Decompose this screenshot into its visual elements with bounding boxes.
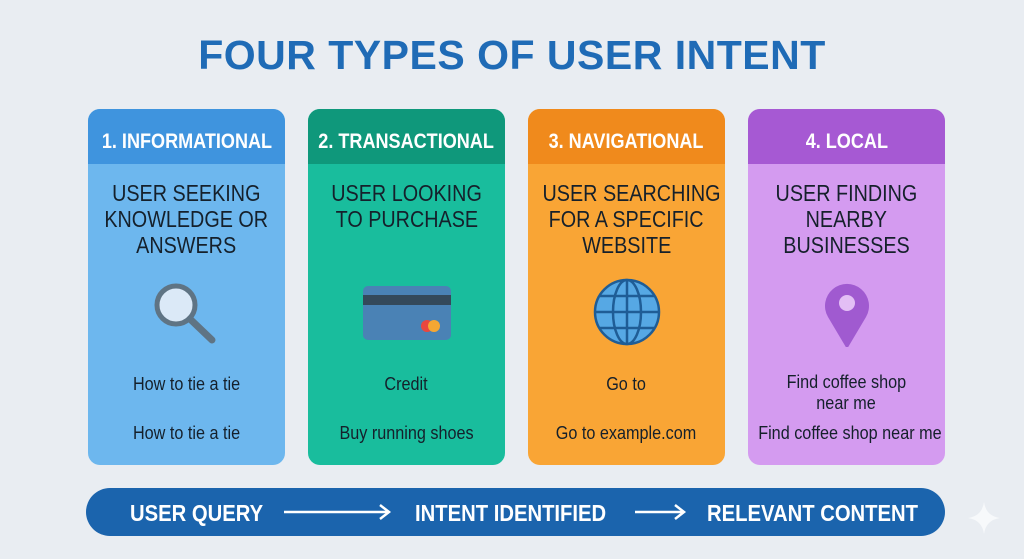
panel: transactional xyxy=(308,109,505,465)
example: transactional 1: Credit xyxy=(385,374,428,394)
step: relevant content: RELEVANT CONTENT xyxy=(707,500,918,526)
arrow 2 xyxy=(635,504,686,520)
header: informational xyxy=(88,109,285,164)
icon: location pin xyxy=(825,284,869,347)
description: navigational xyxy=(542,180,721,258)
panel: local xyxy=(748,109,945,465)
example: informational 2: How to tie a tie xyxy=(133,423,240,443)
description: local xyxy=(776,180,917,258)
header: local xyxy=(748,109,945,164)
step: intent identified: INTENT IDENTIFIED xyxy=(415,500,606,526)
arrow 1 xyxy=(284,504,391,520)
example: local 2: Find coffee shop near me xyxy=(758,423,942,443)
icon: sparkle xyxy=(970,504,998,532)
description: navigational: USER SEARCHING xyxy=(542,180,721,206)
icon: magnifying glass xyxy=(154,284,216,344)
icon: globe xyxy=(594,278,660,346)
header: transactional: 2. TRANSACTIONAL xyxy=(319,130,494,152)
description: local: USER FINDING xyxy=(776,180,917,206)
step: user query: USER QUERY xyxy=(130,500,263,526)
example: local 1: Find coffee shop xyxy=(787,372,906,392)
description: local: BUSINESSES xyxy=(783,232,910,258)
header: transactional xyxy=(308,109,505,164)
example: informational 1: How to tie a tie xyxy=(133,374,240,394)
example: local 1 xyxy=(787,372,906,413)
example: navigational 2: Go to example.com xyxy=(556,423,697,443)
description: navigational: WEBSITE xyxy=(582,232,671,258)
description: informational: ANSWERS xyxy=(136,232,236,258)
description: local: NEARBY xyxy=(806,206,887,232)
example: navigational 1: Go to xyxy=(607,374,646,394)
description: transactional: TO PURCHASE xyxy=(335,206,478,232)
example: transactional 2: Buy running shoes xyxy=(339,423,474,443)
panel: navigational xyxy=(528,109,725,465)
title: FOUR TYPES OF USER INTENT xyxy=(198,32,826,78)
icon: credit card xyxy=(363,286,451,340)
description: informational: USER SEEKING xyxy=(112,180,261,206)
header: navigational xyxy=(528,109,725,164)
flow bar xyxy=(86,488,945,536)
header: informational: 1. INFORMATIONAL xyxy=(101,130,272,152)
panel: informational xyxy=(88,109,285,465)
description: transactional xyxy=(331,180,482,232)
description: informational: KNOWLEDGE OR xyxy=(105,206,268,232)
description: navigational: FOR A SPECIFIC xyxy=(549,206,704,232)
example: local 1: near me xyxy=(817,393,876,413)
description: informational xyxy=(105,180,268,258)
header: local: 4. LOCAL xyxy=(805,130,888,152)
description: transactional: USER LOOKING xyxy=(331,180,482,206)
header: navigational: 3. NAVIGATIONAL xyxy=(549,130,704,152)
